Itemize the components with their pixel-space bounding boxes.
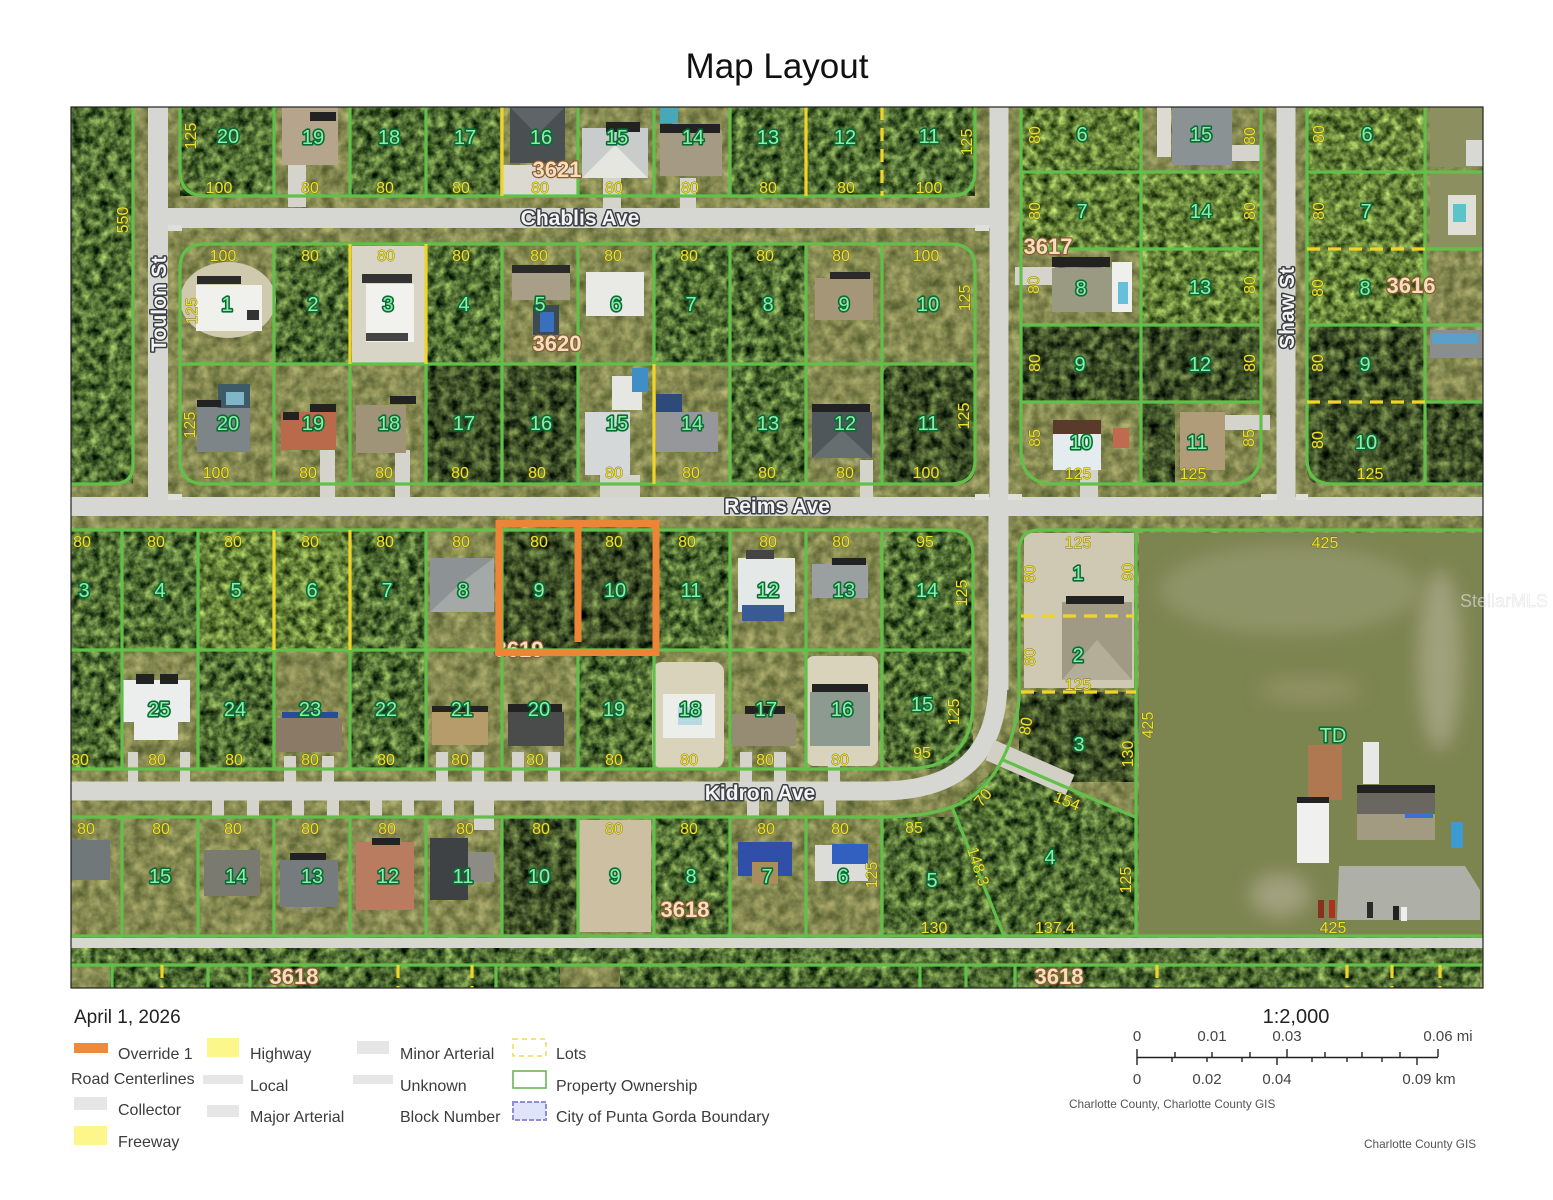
scale bar: 0.01	[1197, 1028, 1227, 1045]
lot numbers: 7	[761, 866, 773, 888]
parcel boundary lines	[71, 107, 1483, 988]
scale bar	[1133, 1028, 1473, 1088]
legend: highway	[207, 1038, 311, 1063]
lot dimension labels: 80	[756, 248, 774, 265]
lot dimension labels: 80	[152, 821, 170, 838]
lot dimension labels: 148.3	[963, 845, 992, 888]
map frame	[71, 107, 1483, 988]
lot dimension labels: 80	[452, 534, 470, 551]
lot dimension labels: 125	[1357, 466, 1383, 483]
legend: local: Local	[250, 1078, 288, 1095]
lot numbers: 10	[1070, 432, 1092, 454]
lot dimension labels: 80	[681, 180, 699, 197]
block numbers	[270, 157, 1435, 989]
lot dimension labels: 80	[456, 821, 474, 838]
lot dimension labels: 125	[954, 580, 971, 606]
lot dimension labels: 80	[756, 752, 774, 769]
lot numbers: 7	[1360, 201, 1372, 223]
lot numbers: 17	[454, 127, 476, 149]
lot numbers: 8	[762, 294, 774, 316]
lot numbers: 4	[458, 294, 470, 316]
scale bar: 0.09 km	[1402, 1071, 1456, 1088]
lot numbers: 3	[78, 580, 90, 602]
lot dimension labels: 80	[1022, 565, 1039, 583]
lot dimension labels: 80	[1311, 202, 1328, 220]
lot numbers: 19	[302, 127, 324, 149]
scale bar: 0.02	[1192, 1071, 1222, 1088]
lot numbers: 6	[1076, 124, 1088, 146]
lot numbers: 9	[1359, 354, 1371, 376]
lot dimension labels: 80	[1310, 431, 1327, 449]
lot dimension labels: 85	[1027, 429, 1044, 447]
lot dimension labels: 80	[526, 752, 544, 769]
block numbers: 3618	[661, 897, 709, 922]
block numbers: 3620	[533, 331, 581, 356]
lot numbers: 5	[926, 870, 938, 892]
lot numbers: 24	[224, 699, 246, 721]
lot numbers: 6	[837, 866, 849, 888]
lot dimension labels: 154	[1051, 789, 1082, 815]
legend: freeway: Freeway	[118, 1134, 179, 1151]
lot dimension labels: 70	[971, 786, 996, 810]
road names: Kidron Ave	[705, 782, 815, 805]
lot numbers: 20	[528, 699, 550, 721]
lot numbers: 18	[378, 413, 400, 435]
lot dimension labels: 125	[1065, 677, 1091, 694]
road names: Shaw St	[1276, 267, 1299, 349]
map panel	[71, 107, 1483, 989]
dark vegetation lots	[426, 325, 1483, 936]
lot dimension labels: 80	[378, 821, 396, 838]
house: top row	[282, 107, 722, 178]
lot dimension labels: 125	[864, 862, 881, 888]
lot numbers: 5	[230, 580, 242, 602]
lot dimension labels: 80	[1242, 127, 1259, 145]
legend: property ownership	[513, 1071, 697, 1095]
lot numbers	[78, 124, 1377, 892]
lot numbers: 14	[681, 413, 703, 435]
lot dimension labels: 130	[1120, 741, 1137, 767]
legend: highway: Highway	[250, 1046, 311, 1063]
lot dimension labels: 100	[203, 465, 229, 482]
legend: block number: Block Number	[400, 1109, 501, 1126]
lot numbers: 20	[217, 413, 239, 435]
driveways	[128, 145, 1270, 830]
lot dimension labels: 100	[210, 248, 236, 265]
lot numbers: 15	[606, 127, 628, 149]
lot dimension labels: 80	[759, 180, 777, 197]
scale bar: 0	[1133, 1028, 1141, 1045]
house: east blocks	[1052, 107, 1483, 470]
lot dimension labels: 80	[530, 248, 548, 265]
lot dimension labels: 137.4	[1035, 920, 1075, 937]
lot dimension labels: 80	[377, 248, 395, 265]
lot dimension labels: 80	[375, 465, 393, 482]
legend: collector: Collector	[118, 1102, 182, 1119]
lot dimension labels: 80	[1017, 716, 1037, 736]
lot numbers: 8	[1359, 278, 1371, 300]
lot numbers: 22	[375, 699, 397, 721]
lot dimension labels: 80	[682, 465, 700, 482]
lot numbers: TD	[1320, 725, 1346, 747]
house: below Reims row two	[122, 674, 870, 752]
road network	[71, 107, 1483, 943]
lot numbers: 16	[530, 413, 552, 435]
lot dimension labels: 80	[1027, 202, 1044, 220]
lot dimension labels: 80	[225, 752, 243, 769]
lot numbers: 3	[382, 294, 394, 316]
lot dimension labels: 425	[1320, 920, 1346, 937]
legend: road centerlines heading: Road Centerlines	[71, 1071, 195, 1088]
lot dimension labels: 80	[451, 465, 469, 482]
selected parcels 9 and 10 outline	[499, 524, 656, 652]
lot dimension labels: 80	[452, 248, 470, 265]
lot dimension labels: 80	[605, 534, 623, 551]
scale bar: 0	[1133, 1071, 1141, 1088]
scale bar: 0.06 mi	[1423, 1028, 1473, 1045]
lot numbers: 7	[685, 294, 697, 316]
lot numbers: 12	[377, 866, 399, 888]
road names: Toulon St	[148, 256, 171, 352]
lot dimension labels: 80	[77, 821, 95, 838]
house: row three	[197, 368, 872, 475]
lot dimension labels: 80	[1027, 354, 1044, 372]
lot dimension labels: 80	[147, 534, 165, 551]
lot numbers: 11	[453, 866, 473, 888]
lot dimension labels: 80	[832, 534, 850, 551]
lot dimension labels: 80	[148, 752, 166, 769]
lot numbers: 9	[838, 294, 850, 316]
lot numbers: 2	[307, 294, 319, 316]
lot numbers: 18	[679, 699, 701, 721]
lot dimension labels: 80	[832, 248, 850, 265]
lot dimension labels: 80	[1022, 648, 1039, 666]
lot numbers: 1	[221, 294, 233, 316]
block numbers: 3618	[1035, 964, 1083, 989]
lot dimension labels: 80	[73, 534, 91, 551]
scale bar: 0.04	[1262, 1071, 1292, 1088]
lot dimension labels: 125	[1118, 867, 1135, 893]
legend	[71, 1038, 769, 1151]
legend: major arterial: Major Arterial	[250, 1109, 344, 1126]
lot dimension labels: 80	[605, 821, 623, 838]
lot dimension labels: 80	[532, 821, 550, 838]
lot dimension labels: 125	[183, 123, 200, 149]
road names	[148, 207, 1299, 805]
lot numbers: 11	[919, 126, 939, 148]
lot dimension labels: 80	[377, 752, 395, 769]
lot dimension labels: 80	[301, 180, 319, 197]
lot dimension labels: 80	[680, 821, 698, 838]
lot numbers: 16	[530, 127, 552, 149]
legend: minor arterial: Minor Arterial	[400, 1046, 494, 1063]
lot dimension labels: 80	[376, 180, 394, 197]
lot dimension labels: 80	[604, 248, 622, 265]
lot dimension labels: 80	[605, 465, 623, 482]
lot dimension labels: 125	[959, 129, 976, 155]
lot dimension labels: 125	[182, 412, 199, 438]
lot dimension labels: 125	[946, 699, 963, 725]
lot numbers: 3	[1073, 734, 1085, 756]
lot numbers: 10	[528, 866, 550, 888]
lot dimension labels: 100	[913, 465, 939, 482]
legend: major arterial	[207, 1105, 344, 1126]
house: row two	[196, 265, 873, 342]
legend: property ownership: Property Ownership	[556, 1078, 697, 1095]
date: April 1, 2026	[74, 1007, 181, 1028]
block numbers: 3621	[533, 157, 581, 182]
lot dimension labels: 130	[921, 920, 947, 937]
lot numbers: 14	[916, 580, 938, 602]
buildings: TD lot	[1297, 742, 1480, 921]
lot numbers: 14	[682, 127, 704, 149]
lot numbers: 4	[1044, 847, 1056, 869]
legend: override 1: Override 1	[118, 1046, 193, 1063]
lot dimension labels: 80	[224, 821, 242, 838]
lot numbers: 12	[757, 580, 779, 602]
legend: minor arterial	[357, 1041, 494, 1063]
lot dimension labels: 125	[956, 403, 973, 429]
lot numbers: 13	[833, 580, 855, 602]
houses	[71, 107, 1483, 921]
lot dimension labels: 80	[1310, 354, 1327, 372]
lot numbers: 15	[149, 866, 171, 888]
medium vegetation lots	[71, 107, 1483, 988]
lot dimension labels: 125	[957, 285, 974, 311]
legend: freeway	[74, 1126, 179, 1151]
block numbers: 3618	[270, 964, 318, 989]
lot dimension labels: 80	[680, 248, 698, 265]
lot dimension labels: 125	[1180, 466, 1206, 483]
lot dimension labels: 95	[913, 745, 931, 762]
lot dimension labels: 95	[916, 534, 934, 551]
lot numbers: 19	[603, 699, 625, 721]
lot numbers: 16	[831, 699, 853, 721]
lot dimension labels: 125	[1065, 535, 1091, 552]
lot dimension labels: 80	[680, 752, 698, 769]
lot dimension labels: 80	[759, 534, 777, 551]
watermark: StellarMLS	[1460, 591, 1548, 611]
lot dimension labels: 85	[1241, 429, 1258, 447]
block numbers: 3617	[1024, 234, 1072, 259]
aerial grass base	[71, 107, 1483, 988]
lot numbers: 11	[681, 580, 701, 602]
light vegetation lots	[198, 107, 1425, 650]
lot numbers: 25	[148, 699, 170, 721]
lot numbers: 20	[217, 126, 239, 148]
lot dimension labels: 80	[1310, 279, 1327, 297]
lot dimension labels: 80	[376, 534, 394, 551]
lot numbers: 17	[755, 699, 777, 721]
lot dimension labels: 80	[1242, 276, 1259, 294]
lot dimension labels: 100	[916, 180, 942, 197]
lot numbers: 2	[1072, 645, 1084, 667]
lot numbers: 10	[1355, 432, 1377, 454]
lot dimension labels: 425	[1140, 712, 1157, 738]
lot numbers: 6	[610, 294, 622, 316]
lot dimension labels: 80	[678, 534, 696, 551]
lot dimension labels: 100	[913, 248, 939, 265]
lot numbers: 9	[1074, 354, 1086, 376]
lot dimension labels: 80	[605, 752, 623, 769]
lot numbers: 12	[1189, 354, 1211, 376]
lot dimension labels: 125	[184, 298, 201, 324]
lot numbers: 15	[606, 413, 628, 435]
lot numbers: 13	[757, 127, 779, 149]
lot numbers: 12	[834, 127, 856, 149]
legend: local	[203, 1075, 288, 1095]
lot numbers: 11	[1187, 432, 1207, 454]
legend: lots: Lots	[556, 1046, 586, 1063]
lot dimension labels: 80	[1027, 126, 1044, 144]
lot numbers: 4	[154, 580, 166, 602]
lot dimension labels: 80	[528, 465, 546, 482]
lot numbers: 9	[533, 580, 545, 602]
lot numbers: 7	[1076, 201, 1088, 223]
lot numbers: 8	[1075, 278, 1087, 300]
lot dimension labels: 80	[605, 180, 623, 197]
lot dimension labels: 80	[301, 248, 319, 265]
lot dimension labels: 80	[836, 465, 854, 482]
lot dimension labels: 80	[1026, 276, 1043, 294]
lot dimension labels: 80	[1311, 125, 1328, 143]
lot dimension labels: 80	[301, 752, 319, 769]
title: Map Layout	[686, 47, 869, 86]
lot numbers: 21	[451, 699, 473, 721]
lot dimension labels: 85	[905, 820, 923, 837]
lot dimension labels: 80	[451, 752, 469, 769]
legend: city boundary: City of Punta Gorda Boundary	[556, 1109, 769, 1126]
lot dimension labels: 80	[301, 821, 319, 838]
lot dimension labels: 425	[1312, 535, 1338, 552]
credit: GIS: Charlotte County GIS	[1364, 1137, 1476, 1151]
lot dimension labels: 80	[452, 180, 470, 197]
lot dimension labels: 80	[530, 534, 548, 551]
scale bar: 0.03	[1272, 1028, 1302, 1045]
lot dimension labels: 80	[757, 821, 775, 838]
lot numbers: 8	[685, 866, 697, 888]
lot dimension labels: 90	[1120, 563, 1137, 581]
lot dimension labels: 80	[299, 465, 317, 482]
lot dimension labels: 80	[224, 534, 242, 551]
lot dimension labels	[71, 123, 1383, 937]
legend: unknown: Unknown	[400, 1078, 467, 1095]
lot dimension labels: 80	[831, 752, 849, 769]
open field	[1139, 533, 1483, 936]
block numbers: 3616	[1387, 273, 1435, 298]
road names: Chablis Ave	[521, 207, 639, 230]
lot numbers: 10	[604, 580, 626, 602]
lot numbers: 23	[299, 699, 321, 721]
lot dimension labels: 80	[758, 465, 776, 482]
house: below Reims row one	[430, 550, 868, 621]
lot dimension labels: 125	[1065, 466, 1091, 483]
lot numbers: 6	[306, 580, 318, 602]
lot numbers: 13	[1189, 277, 1211, 299]
legend: city boundary	[513, 1102, 769, 1126]
lot numbers: 18	[378, 127, 400, 149]
lot numbers: 7	[381, 580, 393, 602]
lot dimension labels: 80	[837, 180, 855, 197]
house: bottom row	[71, 838, 868, 910]
lot numbers: 14	[1190, 201, 1212, 223]
lot dimension labels: 80	[531, 180, 549, 197]
lot dimension labels: 80	[1242, 354, 1259, 372]
lot numbers: 5	[534, 294, 546, 316]
lot dimension labels: 550	[115, 207, 132, 233]
legend: collector	[74, 1097, 182, 1119]
lot numbers: 19	[302, 413, 324, 435]
lot dimension labels: 100	[206, 180, 232, 197]
lot dimension labels: 80	[301, 534, 319, 551]
road names: Reims Ave	[724, 495, 830, 518]
scale ratio: 1:2,000	[1263, 1006, 1329, 1028]
legend: unknown	[353, 1075, 467, 1095]
lot numbers: 17	[453, 413, 475, 435]
legend: override 1	[74, 1043, 193, 1063]
lot numbers: 9	[609, 866, 621, 888]
lot numbers: 13	[757, 413, 779, 435]
lot numbers: 10	[917, 294, 939, 316]
sand and concrete pads	[180, 107, 1483, 932]
lot numbers: 13	[301, 866, 323, 888]
lot numbers: 1	[1072, 563, 1084, 585]
credit: county: Charlotte County, Charlotte County GIS	[1069, 1097, 1275, 1111]
lot numbers: 12	[834, 413, 856, 435]
house: commercial lot two	[1062, 596, 1132, 680]
lot numbers: 11	[918, 413, 938, 435]
lot numbers: 15	[911, 694, 933, 716]
lot dimension labels: 80	[1242, 202, 1259, 220]
block numbers under parcels: 3619	[495, 637, 543, 662]
lot numbers: 6	[1361, 124, 1373, 146]
lot dimension labels: 80	[831, 821, 849, 838]
lot dimension labels: 80	[71, 752, 89, 769]
lot numbers: 8	[457, 580, 469, 602]
legend: lots	[513, 1039, 586, 1063]
lot numbers: 14	[225, 866, 247, 888]
lot numbers: 15	[1190, 124, 1212, 146]
